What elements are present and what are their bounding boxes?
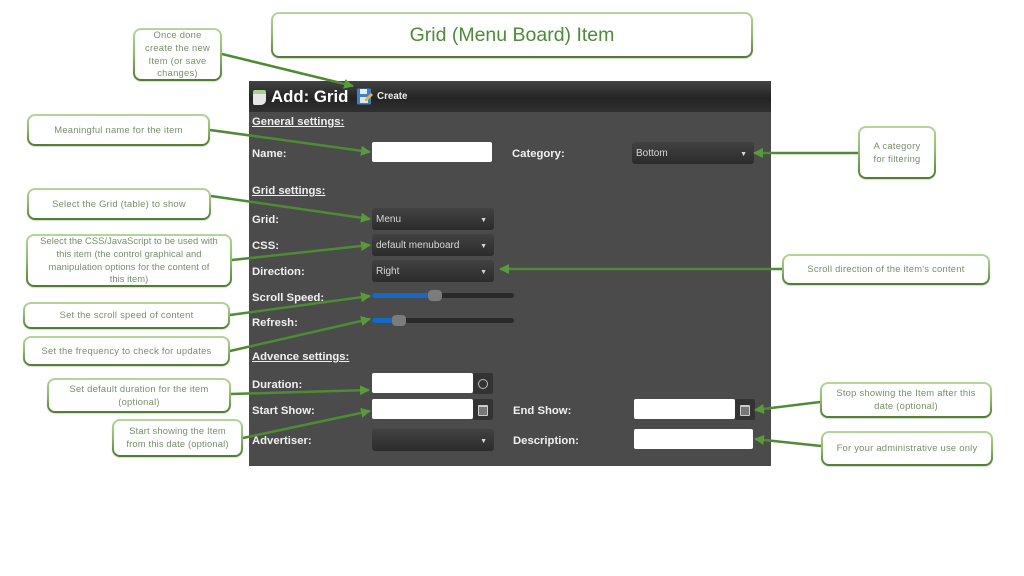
arrow: category xyxy=(754,152,858,154)
callout: scroll speed xyxy=(23,302,230,329)
callout: css: this item) xyxy=(110,273,148,284)
arrow: grid xyxy=(211,196,370,219)
select: direction xyxy=(372,260,494,282)
callout: start show: Start showing the Item xyxy=(129,425,226,436)
callout: name xyxy=(27,114,210,146)
callout: name: Meaningful name for the item xyxy=(54,124,183,135)
title xyxy=(271,12,753,58)
callout: grid: Select the Grid (table) to show xyxy=(52,198,186,209)
callout: create: Once done xyxy=(153,29,202,40)
callout: category xyxy=(858,126,936,179)
slider: scroll speed xyxy=(372,293,514,298)
arrow: description xyxy=(755,439,821,446)
callout: scroll speed: Set the scroll speed of content xyxy=(60,309,193,320)
label: refresh: Refresh: xyxy=(252,317,298,329)
callout: grid xyxy=(27,188,211,220)
input: name xyxy=(372,142,492,162)
icon: save xyxy=(357,88,373,104)
label: start show: Start Show: xyxy=(252,405,315,417)
label: duration: Duration: xyxy=(252,379,302,391)
icon: calendar button xyxy=(473,399,493,420)
callout: css: Select the CSS/JavaScript to be used with xyxy=(40,235,218,246)
callout: refresh: Set the frequency to check for updates xyxy=(41,345,212,356)
callout: create: changes) xyxy=(157,67,198,78)
heading: advance settings: Advence settings: xyxy=(252,351,349,363)
input: end show xyxy=(634,399,735,419)
select: category: Bottom xyxy=(636,148,668,159)
arrow: create xyxy=(222,54,353,86)
label: description: Description: xyxy=(513,435,579,447)
select: css: default menuboard xyxy=(376,240,459,251)
callout: create xyxy=(133,28,222,81)
select: direction: Right xyxy=(376,266,399,277)
callout: description xyxy=(821,431,993,466)
arrow: refresh xyxy=(230,319,370,351)
label: css: CSS: xyxy=(252,240,279,252)
icon: clock button xyxy=(473,373,493,394)
callout: end show xyxy=(820,382,992,418)
arrow: direction xyxy=(500,268,782,270)
callout: category: for filtering xyxy=(873,152,921,164)
heading: general settings: General settings: xyxy=(252,116,344,128)
slider: refresh xyxy=(372,318,514,323)
icon: grid note xyxy=(253,90,266,105)
arrow: end show xyxy=(755,402,820,410)
callout: create: Item (or save xyxy=(149,54,206,66)
select: category: ▼ xyxy=(740,151,747,158)
select: grid xyxy=(372,208,494,230)
select: css: ▼ xyxy=(480,243,487,250)
callout: create: create the new xyxy=(145,42,210,53)
arrow: css xyxy=(232,245,370,260)
callout: refresh xyxy=(23,336,230,366)
callout: duration: Set default duration for the item xyxy=(69,383,209,394)
arrow: start show xyxy=(243,411,370,438)
arrow: name xyxy=(210,130,370,152)
input: duration xyxy=(372,373,473,393)
label: scroll speed: Scroll Speed: xyxy=(252,292,324,304)
header bar xyxy=(249,81,771,112)
select: category xyxy=(632,142,754,164)
input: start show xyxy=(372,399,473,419)
panel: add grid form xyxy=(249,81,771,466)
callout: start show: from this date (optional) xyxy=(126,438,229,449)
select: advertiser xyxy=(372,429,494,451)
heading: grid settings: Grid settings: xyxy=(252,185,325,197)
label: end show: End Show: xyxy=(513,405,571,417)
callout: css: this item (the control graphical and xyxy=(56,248,202,259)
callout: direction: Scroll direction of the item's content xyxy=(807,263,965,274)
label: grid: Grid: xyxy=(252,214,279,226)
callout: category: A category xyxy=(874,140,920,151)
icon: calendar button xyxy=(735,399,755,420)
form title: Add: Grid xyxy=(271,87,348,106)
label: category: Category: xyxy=(512,148,565,160)
select: grid: Menu xyxy=(376,214,401,225)
label: advertiser: Advertiser: xyxy=(252,435,312,447)
callout: duration xyxy=(47,378,231,413)
callout: css xyxy=(26,234,232,287)
select: grid: ▼ xyxy=(480,217,487,224)
callout: direction xyxy=(782,254,990,285)
label: direction: Direction: xyxy=(252,266,305,278)
callout: end show: Stop showing the Item after this xyxy=(836,387,976,398)
label: name: Name: xyxy=(252,148,287,160)
callout: description: For your administrative use only xyxy=(837,442,977,453)
create label: Create xyxy=(377,91,408,102)
callout: end show: date (optional) xyxy=(874,400,938,411)
callout: css: manipulation options for the content of xyxy=(49,260,209,272)
select: direction: ▼ xyxy=(480,269,487,276)
callout: duration: (optional) xyxy=(118,396,160,406)
title: Grid (Menu Board) Item xyxy=(410,24,614,46)
input: description xyxy=(634,429,753,449)
callout: start show xyxy=(112,419,243,457)
select: advertiser: ▼ xyxy=(480,438,487,445)
arrow: duration xyxy=(231,390,369,394)
select: css xyxy=(372,234,494,256)
arrow: scroll speed xyxy=(230,296,370,315)
